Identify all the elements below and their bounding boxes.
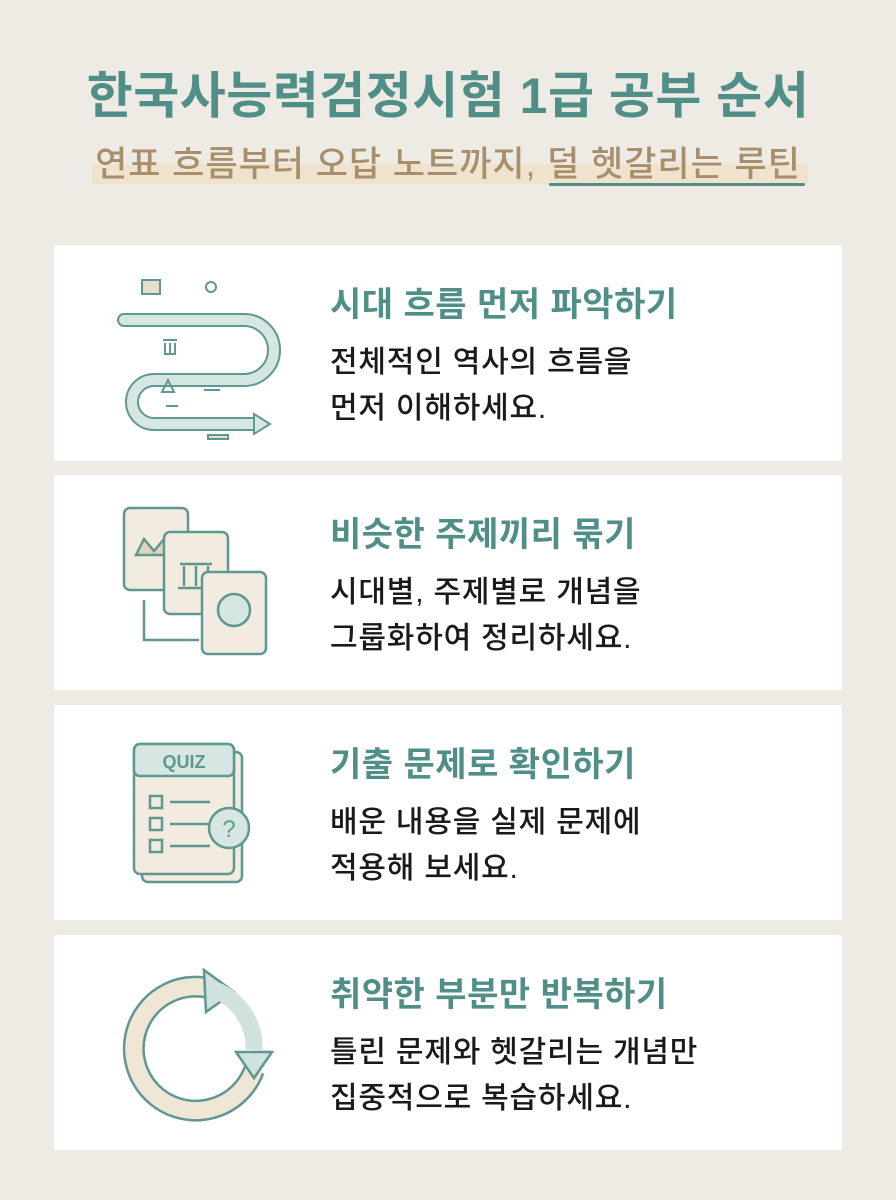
title: 한국사능력검정시험 1급 공부 순서 [87,68,809,124]
heading: 취약한 부분만 반복하기 [330,976,668,1014]
body text [330,806,641,885]
body text: 전체적인 역사의 흐름을 [330,346,632,379]
body text: 틀린 문제와 헷갈리는 개념만 [330,1036,698,1069]
icon: quiz sheet: QUIZ [162,752,206,772]
heading: 기출 문제로 확인하기 [330,746,636,784]
body text [330,1036,698,1115]
body text: 시대별, 주제별로 개념을 [330,576,641,609]
icon: quiz sheet [132,742,250,884]
body text: 적용해 보세요. [330,852,519,885]
body text: 그룹화하여 정리하세요. [330,622,632,655]
body text [330,346,632,425]
body text: 먼저 이해하세요. [330,392,547,425]
icon: quiz sheet: ? [222,816,236,843]
icon: timeline [117,279,281,440]
body text: 배운 내용을 실제 문제에 [330,806,641,839]
card 3 [54,705,842,920]
heading: 비슷한 주제끼리 묶기 [330,516,636,554]
body text [330,576,641,655]
icon: grouped cards [122,506,268,656]
card 2 [54,475,842,690]
subtitle: 연표 흐름부터 오답 노트까지, 덜 헷갈리는 루틴 [95,145,801,184]
heading: 시대 흐름 먼저 파악하기 [330,286,678,324]
icon: cycle arrows [122,968,274,1122]
card 1 [54,245,842,461]
card 4 [54,935,842,1150]
body text: 집중적으로 복습하세요. [330,1082,632,1115]
